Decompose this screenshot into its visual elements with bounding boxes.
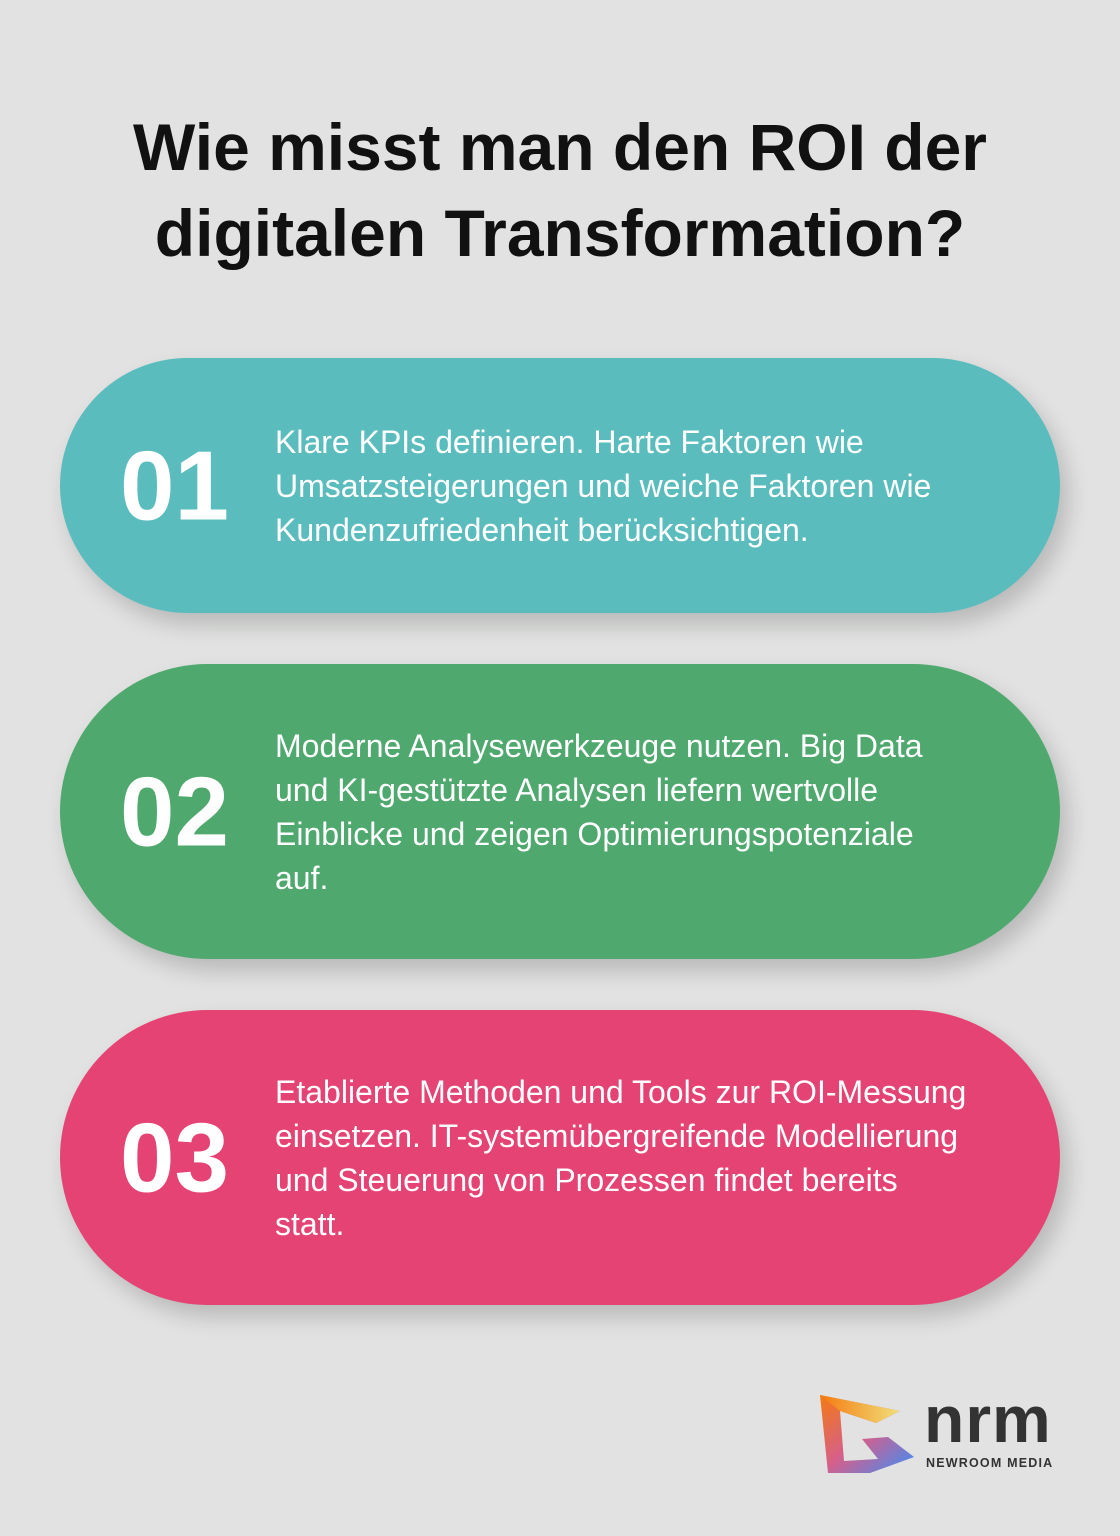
icon: logo mark (820, 1395, 914, 1473)
text 02: Einblicke und zeigen Optimierungspotenziale (275, 816, 914, 852)
text 03: und Steuerung von Prozessen findet bereits (275, 1162, 898, 1198)
title: Wie misst man den ROI der (133, 110, 987, 184)
text 03: einsetzen. IT-systemübergreifende Modellierung (275, 1118, 958, 1154)
text 03: statt. (275, 1206, 344, 1242)
text 03 (275, 1074, 966, 1242)
panel: step 03 (60, 1010, 1060, 1305)
text 01: Klare KPIs definieren. Harte Faktoren wie (275, 424, 864, 460)
number 01: 01 (120, 430, 229, 540)
text 01: Umsatzsteigerungen und weiche Faktoren wie (275, 468, 931, 504)
logo: NEWROOM MEDIA (926, 1456, 1053, 1470)
title: digitalen Transformation? (155, 196, 965, 270)
text 02 (275, 728, 923, 896)
number 02: 02 (120, 756, 229, 866)
panel: step 01 (60, 358, 1060, 613)
panel: step 02 (60, 664, 1060, 959)
text 02: und KI-gestützte Analysen liefern wertvolle (275, 772, 878, 808)
text 02: auf. (275, 860, 328, 896)
text 03: Etablierte Methoden und Tools zur ROI-Messung (275, 1074, 966, 1110)
text 01: Kundenzufriedenheit berücksichtigen. (275, 512, 809, 548)
text 01 (275, 424, 931, 548)
text 02: Moderne Analysewerkzeuge nutzen. Big Data (275, 728, 922, 764)
title (133, 110, 987, 270)
logo text: nrm (924, 1382, 1052, 1456)
logo (820, 1382, 1053, 1473)
number 03: 03 (120, 1102, 229, 1212)
